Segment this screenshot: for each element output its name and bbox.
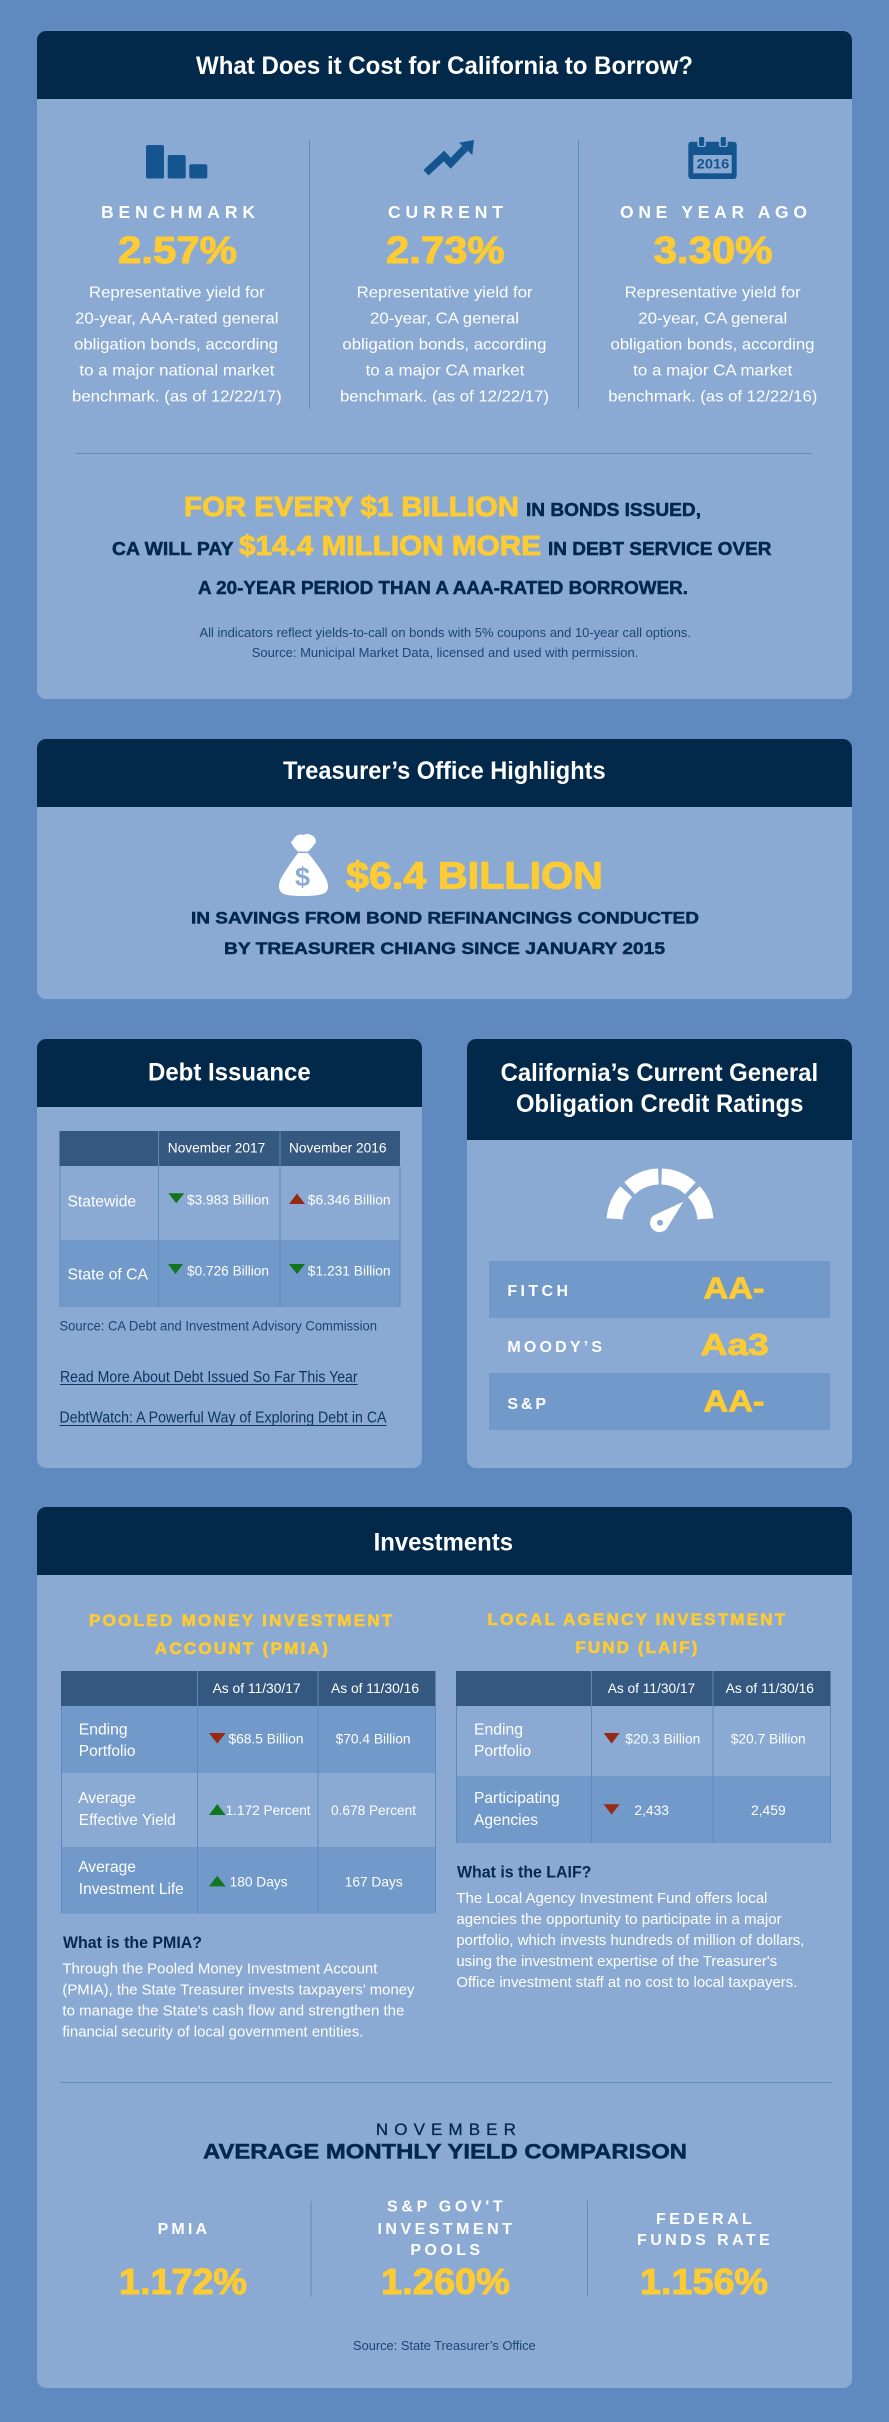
table: debt issuance: Statewide [68,1194,136,1211]
table: laif: $20.3 Billion [625,1731,700,1747]
callout: every $1 billion [112,491,772,598]
description: one year ago: benchmark. (as of 12/22/16) [608,388,817,406]
text block: what is the laif [456,1864,804,1991]
text block: what is the pmia: (PMIA), the State Treasurer invests taxpayers' money [62,1983,415,1999]
icon: rising arrow [426,140,474,173]
column: benchmark [72,145,282,406]
description: benchmark: 20-year, AAA-rated general [75,310,278,328]
subheading: pmia: POOLED MONEY INVESTMENT [89,1611,393,1630]
icon: money bag: $ [295,862,310,892]
subheading: laif [488,1610,786,1657]
heading: investments: Investments [374,1529,513,1557]
heading: credit ratings: Obligation Credit Ratings [516,1090,803,1118]
callout: every $1 billion: FOR EVERY $1 BILLION [184,491,519,522]
stat: pmia [119,2221,247,2302]
icon: calendar 2016 [688,136,737,179]
source: debt: Source: CA Debt and Investment Advisory Commission [60,1318,377,1334]
subheading: pmia: ACCOUNT (PMIA) [155,1639,328,1658]
label: benchmark: BENCHMARK [101,202,255,222]
panel: debt issuance [37,1039,422,1468]
table: pmia: 180 Days [230,1873,288,1889]
table: debt issuance: November 2016 [289,1140,387,1156]
text block: what is the pmia [62,1934,415,2041]
table: pmia: As of 11/30/17 [213,1680,301,1696]
value: 3.30%: 3.30% [654,230,773,272]
description: one year ago [608,284,817,406]
description: current: 20-year, CA general [370,310,519,328]
link: debtwatch: DebtWatch: A Powerful Way of Exploring Debt in CA [60,1410,387,1427]
callout: every $1 billion: IN DEBT SERVICE OVER [548,538,772,559]
stat: s&p gov't investment pools: POOLS [410,2242,480,2259]
stat: federal funds rate [637,2211,770,2302]
icon: bars [146,145,207,178]
table: debt issuance: $0.726 Billion [187,1262,269,1278]
table: laif: $20.7 Billion [731,1731,806,1747]
link: read more: Read More About Debt Issued So Far This Year [60,1369,358,1386]
column: current [340,140,549,406]
panel: treasurer's office highlights [37,739,852,999]
value: 2.57%: 2.57% [118,230,237,272]
rating: fitch [507,1270,764,1305]
description: current [340,284,549,406]
savings caption: BY TREASURER CHIANG SINCE JANUARY 2015 [224,939,665,958]
subheading: laif: LOCAL AGENCY INVESTMENT [488,1610,786,1629]
stat: s&p gov't investment pools [378,2199,512,2302]
stat: s&p gov't investment pools: S&P GOV'T [387,2199,503,2216]
column: one year ago [608,136,817,406]
description: one year ago: to a major CA market [633,362,793,380]
text block: what is the pmia: to manage the State's cash flow and strengthen the [62,2004,404,2020]
description: one year ago: 20-year, CA general [638,310,787,328]
table: debt issuance [60,1131,400,1307]
subheading: laif: FUND (LAIF) [575,1638,697,1657]
description: current: to a major CA market [366,362,525,380]
icon: gauge [615,1176,705,1232]
table: laif: 2,459 [751,1802,786,1818]
label: one year ago: ONE YEAR AGO [620,202,807,222]
table: pmia: $70.4 Billion [336,1731,411,1747]
text block: what is the pmia: financial security of local government entities. [62,2025,363,2041]
table: debt issuance: State of CA [68,1266,148,1283]
panel: what does it cost to borrow [37,31,852,699]
description: current: obligation bonds, according [342,336,546,354]
description: current: Representative yield for [357,284,533,302]
description: one year ago: Representative yield for [625,284,801,302]
stat: pmia: 1.172% [119,2261,247,2302]
table: laif: 2,433 [634,1802,669,1818]
description: benchmark: Representative yield for [89,284,265,302]
table: laif: Agencies [474,1812,538,1829]
source note: All indicators reflect yields-to-call on bonds with 5% coupons and 10-year call options. [200,625,691,640]
rating: moody's: MOODY’S [507,1339,602,1356]
text block: what is the laif: The Local Agency Investment Fund offers local [456,1891,767,1907]
table: laif: Ending [474,1722,523,1739]
stat: pmia: PMIA [158,2221,207,2238]
rating: moody's: Aa3 [701,1327,769,1362]
text block: what is the laif: using the investment expertise of the Treasurer's [456,1954,777,1970]
description: current: benchmark. (as of 12/22/17) [340,388,549,406]
subheading: pmia [89,1611,393,1658]
text block: what is the pmia: What is the PMIA? [63,1934,202,1952]
rating: fitch: FITCH [507,1283,568,1300]
table: laif [456,1671,831,1843]
icon: money bag [279,834,328,896]
stat: s&p gov't investment pools: 1.260% [381,2261,510,2302]
heading: credit ratings: California’s Current General [501,1059,818,1087]
savings caption [191,908,699,958]
table: pmia: $68.5 Billion [228,1731,304,1747]
label: current: CURRENT [388,202,503,222]
table: pmia: Effective Yield [79,1812,176,1829]
heading: yield comparison: NOVEMBER [376,2120,516,2139]
text block: what is the laif: Office investment staff at no cost to local taxpayers. [456,1975,797,1991]
text block: what is the laif: What is the LAIF? [457,1864,591,1882]
savings caption: IN SAVINGS FROM BOND REFINANCINGS CONDUCTED [191,908,699,927]
callout: every $1 billion: $14.4 MILLION MORE [239,530,541,561]
table: pmia: Average [78,1859,136,1876]
text block: what is the laif: portfolio, which invests hundreds of million of dollars, [456,1933,804,1949]
table: pmia: Average [78,1790,136,1807]
icon: calendar 2016: 2016 [697,156,730,172]
panel: credit ratings [467,1039,852,1468]
description: one year ago: obligation bonds, according [610,336,814,354]
table: debt issuance: November 2017 [168,1140,265,1156]
heading: highlights: Treasurer’s Office Highlights [283,757,606,785]
table: laif: Participating [474,1790,560,1807]
ratings table [489,1261,830,1430]
text block: what is the pmia: Through the Pooled Money Investment Account [62,1962,377,1978]
stat: federal funds rate: 1.156% [640,2261,768,2302]
rating: moody's [507,1327,769,1362]
text block: what is the laif: agencies the opportunity to participate in a major [456,1912,782,1928]
value: $6.4 billion: $6.4 BILLION [346,855,603,897]
table: laif: As of 11/30/17 [608,1680,695,1696]
heading: what does it cost: What Does it Cost for California to Borrow? [196,52,693,80]
table: pmia: 1.172 Percent [226,1802,311,1818]
callout: every $1 billion: IN BONDS ISSUED, [526,499,701,520]
table: pmia: 0.678 Percent [331,1802,416,1818]
description: benchmark: benchmark. (as of 12/22/17) [72,388,282,406]
callout: every $1 billion: CA WILL PAY [112,538,234,559]
rating: fitch: AA- [704,1270,764,1305]
source note: Source: Municipal Market Data, licensed and used with permission. [252,645,638,660]
description: benchmark: to a major national market [79,362,275,380]
source note [200,625,691,660]
stat: federal funds rate: FUNDS RATE [637,2232,770,2249]
table: debt issuance: $3.983 Billion [187,1191,269,1207]
heading: credit ratings [501,1059,818,1118]
description: benchmark: obligation bonds, according [74,336,278,354]
rating: s&p: AA- [704,1384,764,1419]
stat: federal funds rate: FEDERAL [656,2211,752,2228]
value: 2.73%: 2.73% [386,230,504,272]
description: benchmark [72,284,282,406]
callout: every $1 billion: A 20-YEAR PERIOD THAN A AAA-RATED BORROWER. [198,577,688,598]
heading: debt issuance: Debt Issuance [148,1059,311,1087]
rating: s&p [507,1384,764,1419]
table: pmia: Ending [79,1722,128,1739]
table: pmia: Portfolio [79,1743,136,1760]
rating: s&p: S&P [507,1396,546,1413]
panel: investments [37,1507,852,2388]
source: treasurer: Source: State Treasurer’s Office [353,2338,536,2353]
table: pmia: As of 11/30/16 [331,1680,419,1696]
heading: yield comparison [203,2120,687,2164]
table: debt issuance: $6.346 Billion [308,1191,391,1207]
table: laif: Portfolio [474,1743,531,1760]
table: debt issuance: $1.231 Billion [308,1262,391,1278]
heading: yield comparison: AVERAGE MONTHLY YIELD COMPARISON [203,2141,687,2164]
table: pmia: Investment Life [79,1881,184,1898]
table: pmia [61,1671,436,1914]
table: pmia: 167 Days [345,1873,403,1889]
table: laif: As of 11/30/16 [726,1680,814,1696]
stat: s&p gov't investment pools: INVESTMENT [378,2221,512,2238]
